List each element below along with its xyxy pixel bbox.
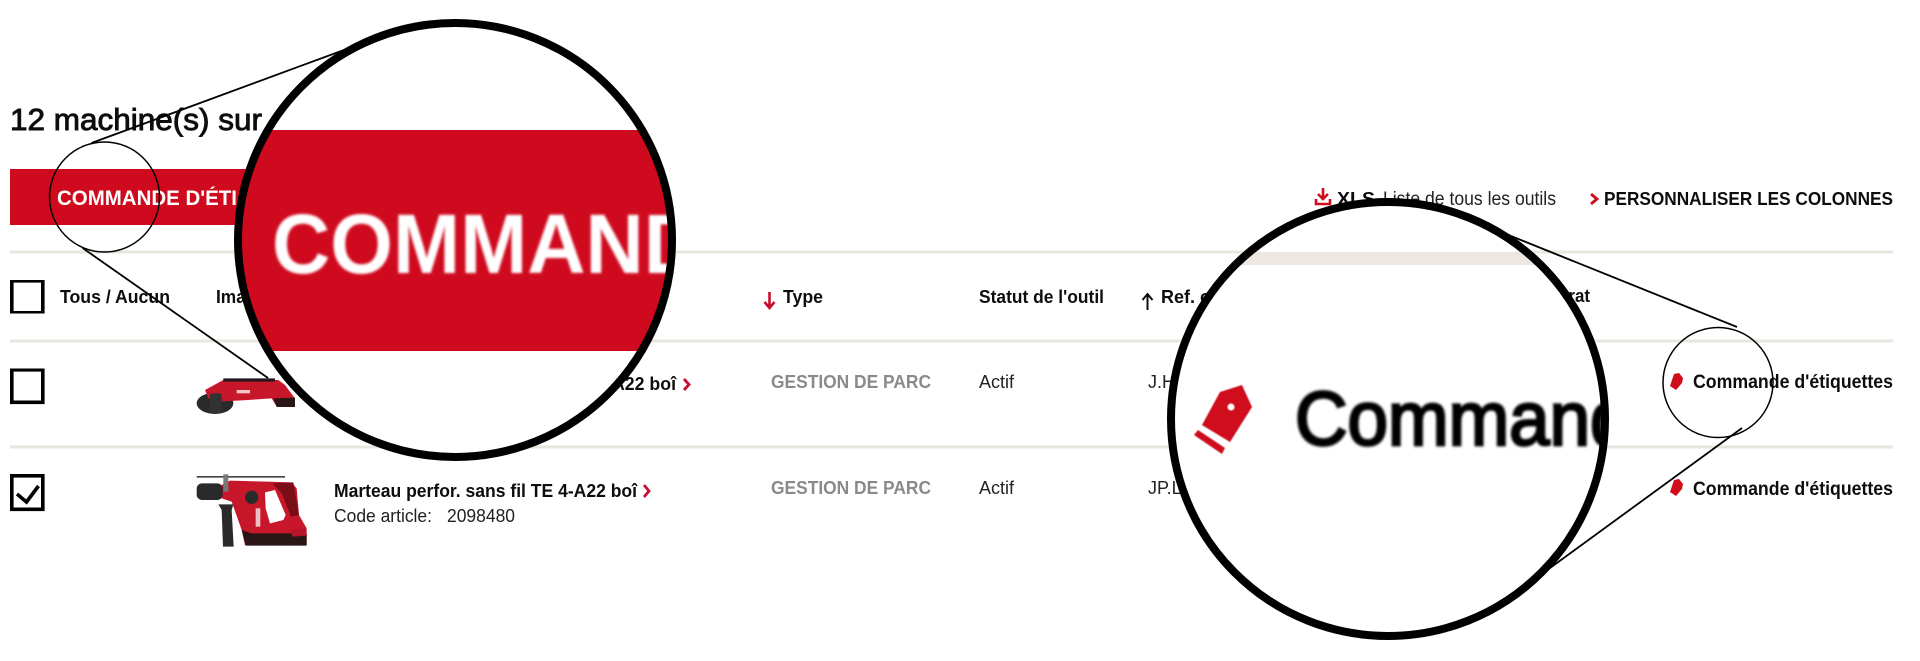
column label: tool status: Statut de l'outil xyxy=(979,287,1104,307)
heading: machine count: 12 machine(s) sur xyxy=(10,103,262,137)
enlarged red band xyxy=(242,130,668,351)
column label: contract: Contrat xyxy=(1530,286,1590,306)
magnifier 1: connector lines and source circle xyxy=(50,50,344,378)
product image: rotary hammer xyxy=(197,474,307,547)
checkbox: select all xyxy=(12,281,43,313)
chevron xyxy=(644,485,649,497)
product name end: A22 boî xyxy=(612,373,677,394)
magnifier lens 2: enlarged label link xyxy=(1167,198,1609,640)
enlarged link text: Commande xyxy=(1295,377,1671,462)
reference value: JP.L xyxy=(1148,478,1182,498)
enlarged tag icon xyxy=(1194,385,1252,454)
checkbox: checked xyxy=(12,476,43,509)
reference value: J.H xyxy=(1148,372,1175,392)
sort arrow: down xyxy=(764,292,774,308)
enlarged divider band xyxy=(1241,252,1535,265)
red action button: COMMANDE D'ÉTI xyxy=(57,187,237,210)
table row 1 xyxy=(12,370,1893,414)
column label: image: Image xyxy=(216,286,266,307)
toolbar: XLS export link: XLS xyxy=(1337,189,1375,209)
table header row xyxy=(12,281,1590,313)
article code value: 2098480 xyxy=(447,505,515,526)
red action button xyxy=(10,169,310,225)
order labels link: Commande d'étiquettes xyxy=(1693,371,1893,393)
sort arrow: up xyxy=(1142,294,1152,310)
article code label: Code article: xyxy=(334,505,432,526)
table row 2 xyxy=(12,474,1893,547)
product name: Marteau perfor. sans fil TE 4-A22 boî xyxy=(334,480,638,501)
checkbox: unchecked xyxy=(12,370,43,402)
column label: type: Type xyxy=(783,287,823,307)
magnifier lens 1: enlarged button xyxy=(234,19,676,461)
status value: Actif xyxy=(979,478,1015,498)
enlarged button text: COMMAND xyxy=(272,197,702,291)
toolbar: XLS export link: Liste de tous les outils xyxy=(1383,189,1556,210)
column label: all / none: Tous / Aucun xyxy=(60,286,170,307)
status value: Actif xyxy=(979,372,1015,392)
icon: tag xyxy=(1670,373,1683,390)
type value: GESTION DE PARC xyxy=(771,372,931,392)
column label: reference: Ref. client xyxy=(1161,287,1247,307)
order labels link: Commande d'étiquettes xyxy=(1693,478,1893,500)
icon: tag xyxy=(1670,479,1683,496)
toolbar: XLS export link xyxy=(1316,188,1556,210)
product image: grinder xyxy=(197,378,295,414)
toolbar: customise columns link: PERSONNALISER LES COLONNES xyxy=(1604,188,1893,209)
type value: GESTION DE PARC xyxy=(771,478,931,498)
chevron xyxy=(684,379,689,390)
magnifier 2: connector lines and source circle xyxy=(1508,235,1773,568)
